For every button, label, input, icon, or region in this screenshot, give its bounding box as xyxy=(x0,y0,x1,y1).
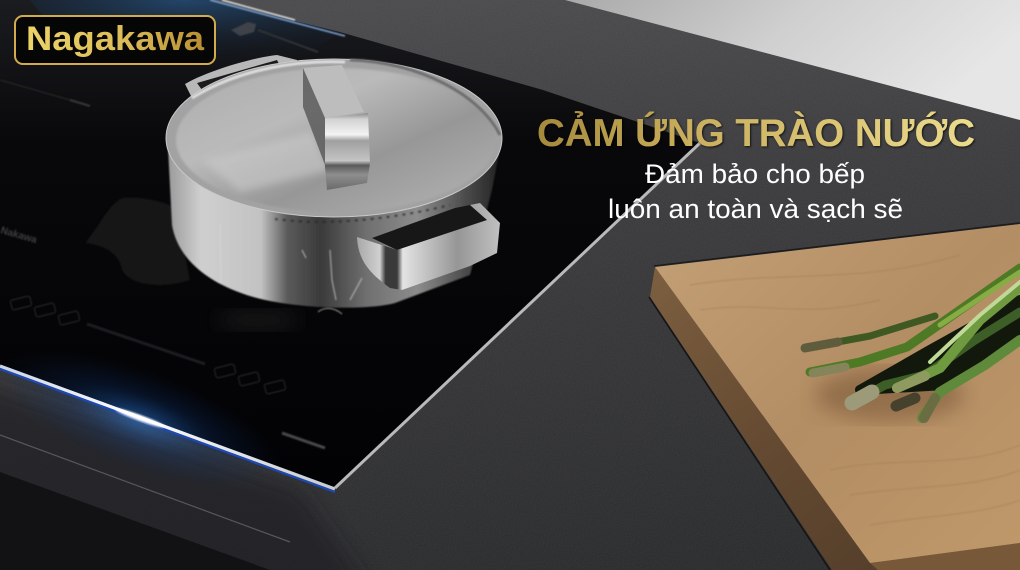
pot lid xyxy=(166,59,502,217)
lid knob xyxy=(303,65,370,190)
brand logo: Nagakawa xyxy=(26,20,205,58)
pot near handle xyxy=(357,203,500,290)
counter front edge xyxy=(0,380,370,570)
handle opening xyxy=(372,205,487,250)
subtitle line 2: luôn an toàn và sạch sẽ xyxy=(608,194,903,224)
faint printed marks xyxy=(0,22,318,246)
pot far handle xyxy=(185,55,298,100)
board shadow beneath asparagus xyxy=(815,369,965,421)
lid sheen xyxy=(202,132,330,192)
pot body xyxy=(168,148,500,308)
water streaks on pot xyxy=(220,205,450,314)
blue glow on front edge xyxy=(0,322,335,518)
cast shadow on glass xyxy=(85,197,190,285)
silver right edge of cooktop xyxy=(335,143,700,488)
subtitle line 1: Đảm bảo cho bếp xyxy=(645,159,865,189)
wall background xyxy=(565,0,1020,120)
title: CẢM ỨNG TRÀO NƯỚC xyxy=(537,111,975,155)
top light streak xyxy=(210,0,345,36)
handle grip xyxy=(357,203,500,290)
wood grain xyxy=(690,255,1020,525)
brand logo xyxy=(15,16,215,64)
pot reflection xyxy=(216,310,300,330)
induction cooktop glass xyxy=(0,0,700,488)
faint printed marks: Nakawa xyxy=(0,225,38,246)
asparagus bunch xyxy=(805,268,1020,418)
stainless steel pot xyxy=(166,55,502,314)
touch controls xyxy=(10,296,325,448)
cutting board xyxy=(649,223,1020,570)
far handle slot xyxy=(197,60,280,90)
